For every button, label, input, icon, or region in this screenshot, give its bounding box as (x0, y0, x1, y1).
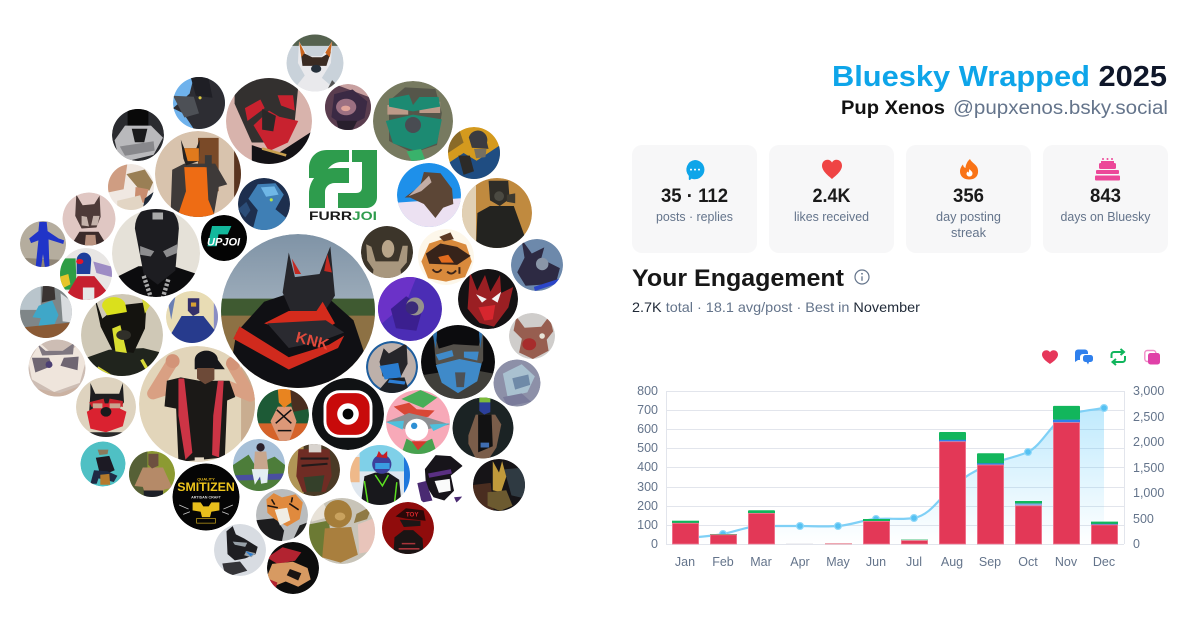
avatar: purple ink wolf (413, 454, 467, 508)
avatar: pink jester bunny (386, 390, 450, 454)
avatar: teddy bear (309, 498, 375, 564)
logo: FurrJoi: FURR JOI (309, 211, 377, 223)
left axis labels: 600 (637, 422, 658, 436)
avatar: purple orb (378, 277, 442, 341)
avatar: Smitizen logo (172, 464, 240, 530)
avatar: big rubber pup in field (221, 234, 375, 388)
avatar: red suit harness (288, 444, 340, 496)
right axis labels: 2,000 (1133, 435, 1164, 449)
avatar: grey pup with collar (214, 524, 266, 576)
avatar: Smitizen logo: SMITIZEN (177, 480, 235, 494)
stat card: posting streak (906, 145, 1031, 253)
avatar: flexing muscle man (139, 346, 255, 462)
title: Bluesky Wrapped 2025 (832, 61, 1167, 93)
avatar: gold armor (473, 459, 525, 511)
avatar: tiger mask (256, 489, 308, 541)
avatar: blue singlet selfie (166, 291, 218, 343)
month labels: Feb (712, 555, 734, 569)
avatar: PupJoi logo (201, 215, 247, 261)
avatar: shirtless man (129, 451, 175, 497)
avatar: red pup mask two (76, 377, 136, 437)
stat card: likes (769, 145, 894, 253)
cumulative area and line (685, 405, 1107, 544)
avatar: spiderman balloons (60, 248, 112, 300)
avatar: motorcycle racer (350, 445, 410, 505)
month labels: Mar (750, 555, 772, 569)
stat card: days on Bluesky: 843 (1090, 186, 1121, 207)
left axis labels (637, 384, 658, 551)
avatar: beard man blond (108, 164, 154, 210)
right axis labels: 3,000 (1133, 384, 1164, 398)
left axis labels: 400 (637, 460, 658, 474)
stat card: posting streak: day posting (936, 210, 1001, 224)
legend icons (1042, 349, 1160, 365)
month labels: Jun (866, 555, 886, 569)
avatar: orange rubber suit selfie (155, 131, 241, 217)
left axis labels: 800 (637, 384, 658, 398)
avatar: old man statue (361, 226, 413, 278)
avatar: red cap black pup (382, 502, 434, 554)
icon: info (855, 270, 869, 284)
avatar: black mask with chains (112, 204, 200, 297)
right axis labels: 1,000 (1133, 486, 1164, 500)
stat card: posts and replies: 35 · 112 (661, 186, 728, 207)
stat card: posting streak: streak (951, 226, 987, 240)
right axis labels (1133, 384, 1164, 551)
icon: likes heart (1042, 350, 1058, 364)
icon: replies bubbles (1075, 350, 1093, 364)
left axis labels: 100 (637, 518, 658, 532)
left axis labels: 700 (637, 403, 658, 417)
avatar: black wolf (173, 77, 225, 129)
icon: birthday cake (1095, 158, 1120, 180)
stacked bars (672, 406, 1118, 544)
month labels: Dec (1093, 555, 1115, 569)
month labels (675, 555, 1115, 569)
stat card: posting streak: 356 (953, 186, 984, 207)
icon: heart (822, 160, 842, 179)
month labels: Apr (790, 555, 810, 569)
avatar: husky fursuit (286, 34, 344, 92)
avatar: red and tan cartoon (267, 542, 319, 594)
avatar: blue trim pup (366, 341, 418, 393)
avatar: red cap black pup: TOY (406, 512, 419, 519)
right axis labels: 0 (1133, 537, 1140, 551)
avatar: yellow rubber pup (81, 294, 163, 376)
month labels: Sep (979, 555, 1001, 569)
month labels: Oct (1018, 555, 1038, 569)
avatar: brown creature blue sky (397, 163, 461, 227)
avatar: garden back view (233, 439, 285, 491)
month labels: Aug (941, 555, 963, 569)
avatar: Smitizen logo: QUALITY (197, 476, 215, 481)
right axis labels: 2,500 (1133, 410, 1164, 424)
right axis labels: 1,500 (1133, 461, 1164, 475)
avatar: blue camo onesie (20, 286, 72, 338)
stat card: days on Bluesky: days on Bluesky (1060, 210, 1151, 224)
avatar: grey wolf painted (494, 360, 540, 406)
month labels: Jan (675, 555, 695, 569)
month labels: May (826, 555, 851, 569)
avatar: moose (509, 313, 555, 359)
logo: FurrJoi (309, 150, 377, 223)
right axis labels: 500 (1133, 512, 1154, 526)
user name and handle (841, 98, 1168, 119)
stat card: days on Bluesky (1043, 145, 1168, 253)
user name and handle: Pup Xenos (841, 98, 945, 119)
icon: chat bubble (686, 160, 704, 180)
month labels: Jul (906, 555, 922, 569)
heading: your engagement: Your Engagement (632, 265, 844, 292)
avatar bubble cloud (20, 34, 563, 594)
stat card: likes: 2.4K (812, 186, 851, 207)
avatar: gas mask jacket (462, 178, 532, 248)
engagement summary: 2.7K total · 18.1 avg/post · Best in November (632, 299, 920, 315)
avatar: red rubber pup mask (226, 78, 312, 164)
avatar: big rubber pup in field: KNK (294, 329, 330, 354)
avatar: red devil (458, 269, 518, 329)
avatar: teal wall man (80, 442, 126, 486)
avatar: muscle black and white (112, 109, 164, 161)
stat card: posts and replies: posts · replies (656, 210, 733, 224)
left axis labels: 500 (637, 441, 658, 455)
avatar: green pup mask in hood (373, 81, 453, 161)
avatar: orange tiger harness (257, 389, 309, 441)
left axis labels: 0 (651, 537, 658, 551)
avatar: Smitizen logo: ARTISAN CRAFT (191, 495, 222, 499)
avatar: purple furry face (325, 84, 371, 130)
avatar: blue robot dragon (238, 178, 290, 230)
month labels: Nov (1055, 555, 1078, 569)
user name and handle: @pupxenos.bsky.social (953, 98, 1168, 119)
icon: quotes squares (1145, 350, 1160, 364)
avatar: blue big pup (421, 325, 495, 399)
avatar: PupJoi logo: UPJOI (207, 236, 241, 248)
avatar: raccoon (28, 340, 86, 396)
avatar: pumpkin dog (418, 229, 474, 285)
left axis labels: 200 (637, 499, 658, 513)
engagement chart (637, 384, 1164, 569)
stat card: posts and replies (632, 145, 757, 253)
avatar: blue zentai suit (20, 221, 66, 267)
avatar: cap man (448, 127, 500, 179)
avatar: red O logo (312, 378, 384, 450)
avatar: bat rubber mask (62, 192, 116, 246)
left axis labels: 300 (637, 480, 658, 494)
stat card: likes: likes received (794, 210, 869, 224)
icon: reposts arrows (1112, 349, 1125, 365)
icon: flame (960, 159, 978, 180)
avatar: dark tank-top (452, 398, 514, 458)
avatar: blue rabbit gas mask (511, 239, 563, 291)
